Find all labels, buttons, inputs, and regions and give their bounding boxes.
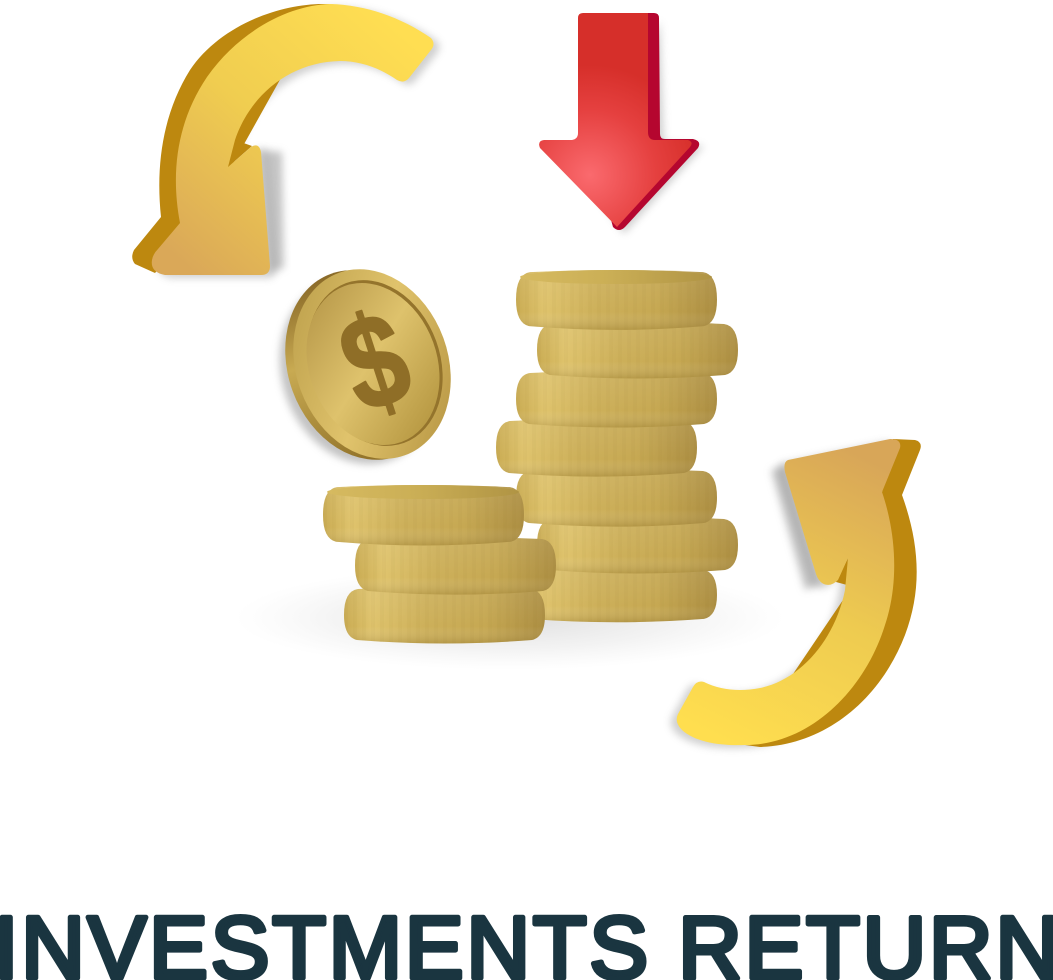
floor shadow under coins bbox=[235, 566, 785, 670]
icon: dollar sign: $ bbox=[323, 282, 426, 441]
arrow: top-left curved gold arrow bbox=[132, 4, 440, 278]
arrow: red downward arrow bbox=[539, 13, 704, 234]
coin: floating dollar coin bbox=[254, 247, 477, 486]
coin stack: tall right stack bbox=[496, 270, 738, 622]
arrow: bottom-right curved gold arrow bbox=[671, 439, 921, 748]
coin stack: short left stack bbox=[323, 485, 556, 644]
